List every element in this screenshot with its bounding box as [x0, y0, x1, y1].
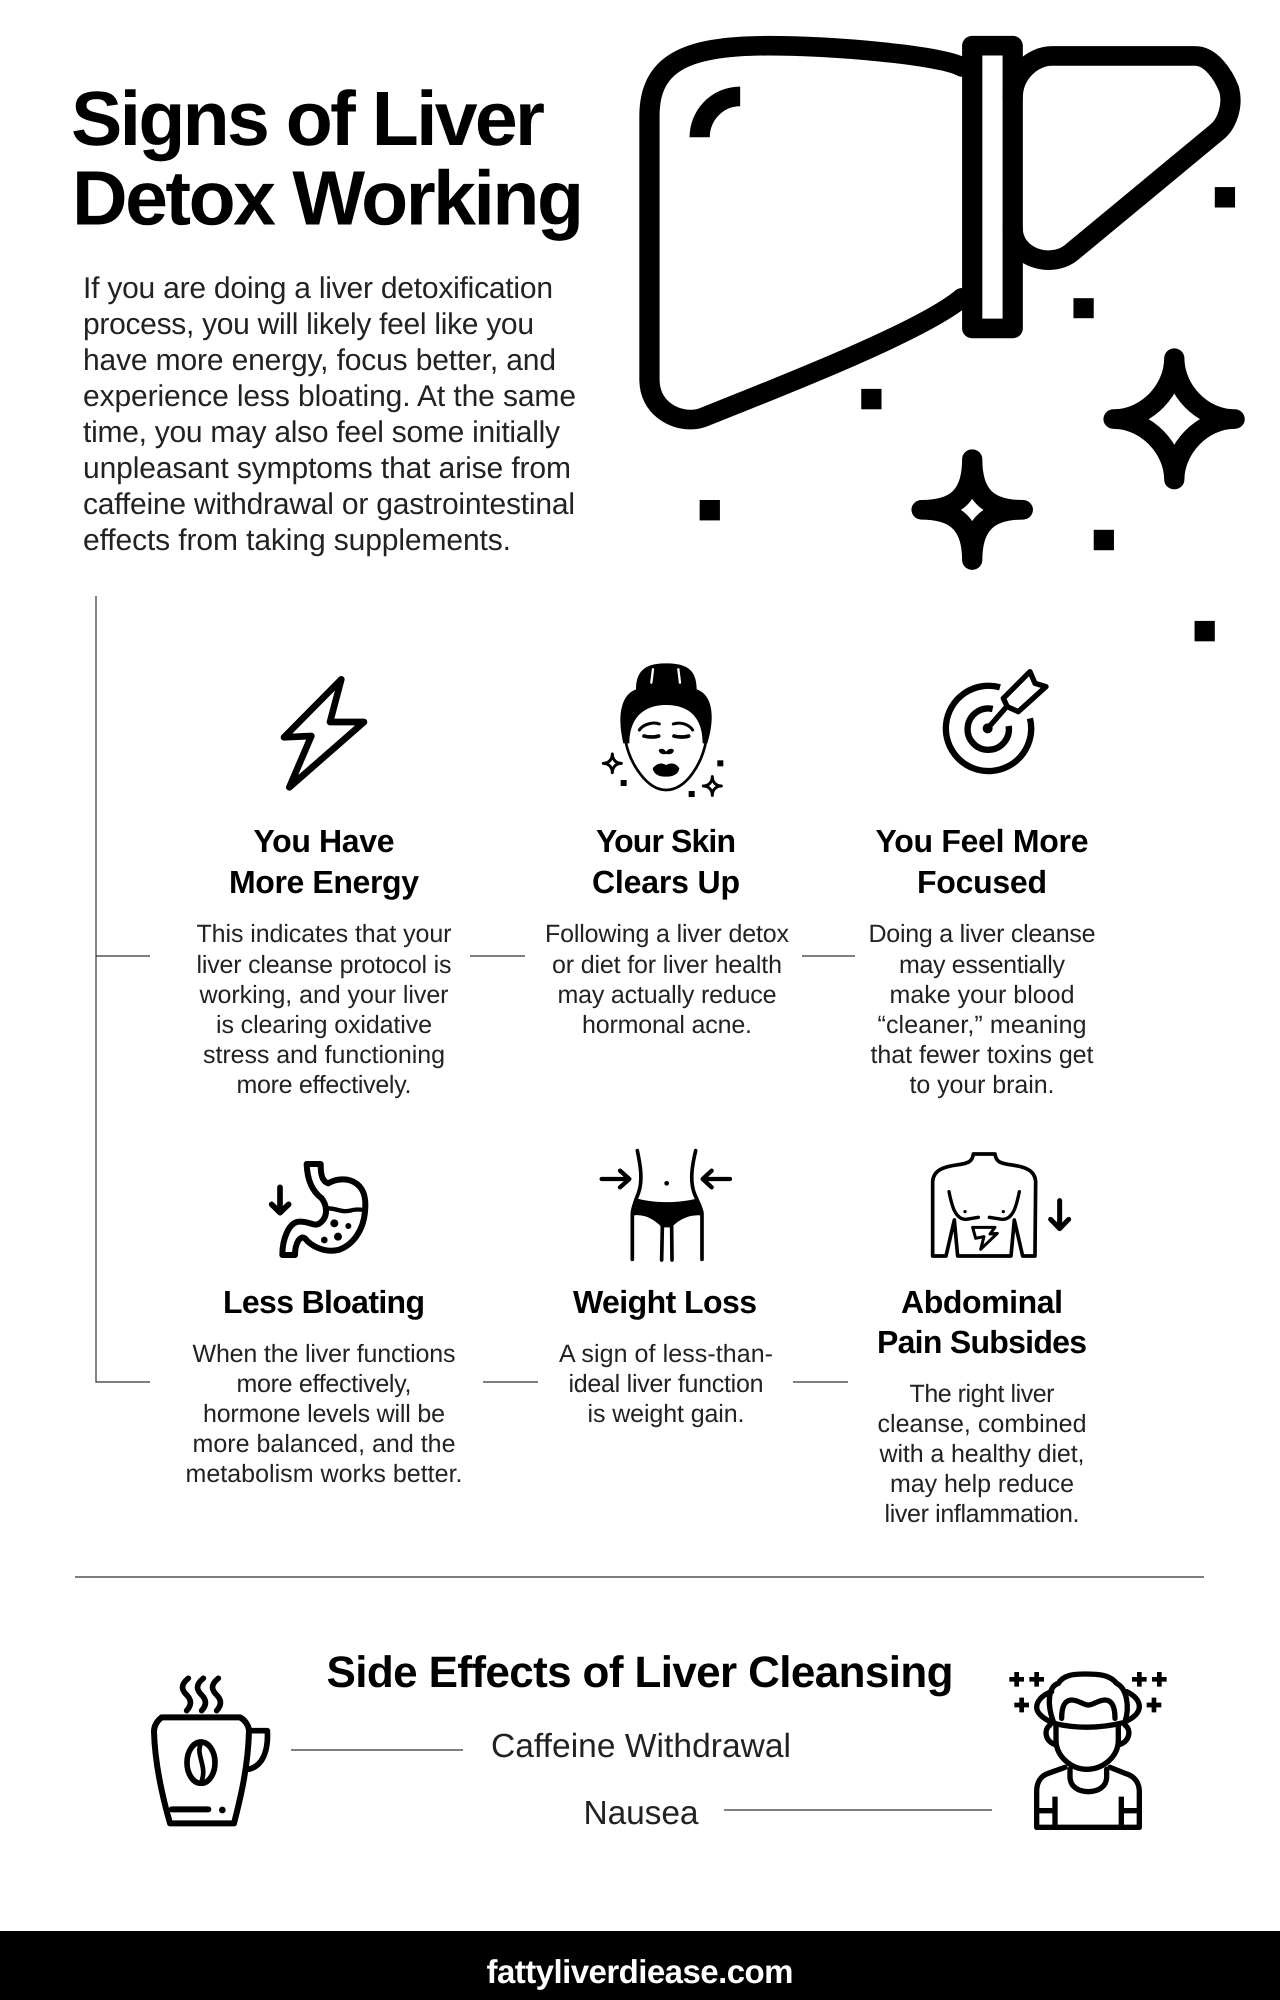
heading: abdominal pain subsides [877, 1284, 1087, 1360]
panel: side effects [154, 1648, 1167, 1832]
text: abdominal pain description [878, 1380, 1086, 1528]
text: skin description: may actually reduce [558, 981, 776, 1009]
panel: weight loss [559, 1151, 773, 1428]
text: focus description: to your brain. [910, 1071, 1054, 1099]
text: bloating description: metabolism works better. [186, 1460, 462, 1488]
icon: dizzy man [1009, 1672, 1167, 1827]
icon: stomach with down arrow [272, 1164, 365, 1255]
connector lines: left rail and branches [96, 596, 855, 1382]
text: focus description: that fewer toxins get [870, 1041, 1094, 1069]
icon: face with sparkles [603, 663, 723, 797]
text: energy description: working, and your liver [198, 981, 448, 1009]
text: energy description [196, 920, 452, 1099]
heading: abdominal pain subsides: Abdominal [901, 1284, 1063, 1320]
heading: you feel more focused [876, 823, 1088, 900]
heading: abdominal pain subsides: Pain Subsides [877, 1324, 1087, 1360]
text: focus description: “cleaner,” meaning [878, 1011, 1086, 1039]
intro paragraph: process, you will likely feel like you [83, 308, 534, 341]
text: focus description: may essentially [899, 951, 1066, 979]
text: weight loss description: is weight gain. [588, 1400, 744, 1428]
text: bloating description: When the liver functions [192, 1340, 456, 1368]
text: caffeine withdrawal: Caffeine Withdrawal [491, 1728, 791, 1765]
heading: you have more energy [229, 823, 419, 900]
heading: you feel more focused: Focused [917, 864, 1047, 900]
intro paragraph: unpleasant symptoms that arise from [83, 452, 571, 485]
text: abdominal pain description: may help reduce [890, 1470, 1074, 1498]
title: Detox Working [72, 156, 584, 242]
panel: your skin clears up [545, 663, 790, 1039]
heading: your skin clears up: Your Skin [596, 823, 736, 859]
text: abdominal pain description: with a healthy diet, [878, 1440, 1084, 1468]
title: Signs of Liver [71, 76, 545, 162]
heading: weight loss: Weight Loss [573, 1284, 757, 1320]
text: energy description: stress and functioning [203, 1041, 445, 1069]
text: energy description: This indicates that your [196, 920, 452, 948]
panel: abdominal pain subsides [877, 1154, 1087, 1528]
text: nausea: Nausea [584, 1795, 699, 1832]
text: abdominal pain description: The right liver [910, 1380, 1054, 1408]
text: focus description [868, 920, 1096, 1099]
text: focus description: make your blood [890, 981, 1074, 1009]
icon: lightning bolt [284, 679, 364, 787]
text: abdominal pain description: liver inflammation. [884, 1500, 1080, 1528]
icon: waist with inward arrows [602, 1151, 730, 1260]
heading: less bloating: Less Bloating [223, 1284, 425, 1320]
text: skin description: Following a liver detox [545, 920, 790, 948]
icon: liver with sparkles [649, 46, 1235, 641]
text: focus description: Doing a liver cleanse [868, 920, 1096, 948]
text: energy description: is clearing oxidative [216, 1011, 432, 1039]
panel: you have more energy [196, 679, 452, 1099]
text: skin description [545, 920, 790, 1039]
intro paragraph: experience less bloating. At the same [83, 380, 576, 413]
text: energy description: liver cleanse protocol is [196, 951, 452, 979]
heading: you have more energy: You Have [254, 823, 394, 859]
intro paragraph: have more energy, focus better, and [83, 344, 556, 377]
intro paragraph [83, 272, 576, 557]
intro paragraph: If you are doing a liver detoxification [83, 272, 553, 305]
heading: side effects of liver cleansing: Side Effects of Liver Cleansing [326, 1648, 954, 1697]
heading: you have more energy: More Energy [229, 864, 419, 900]
text: bloating description [186, 1340, 462, 1488]
text: bloating description: more effectively, [236, 1370, 412, 1398]
text: weight loss description: ideal liver function [568, 1370, 764, 1398]
text: bloating description: more balanced, and the [192, 1430, 456, 1458]
text: skin description: or diet for liver health [552, 951, 782, 979]
footer bar [0, 1931, 1280, 2000]
text: bloating description: hormone levels will be [203, 1400, 445, 1428]
panel: you feel more focused [868, 672, 1096, 1099]
icon: torso with pain bolt [933, 1154, 1069, 1256]
title [71, 76, 584, 242]
intro paragraph: effects from taking supplements. [83, 524, 511, 557]
text: weight loss description: A sign of less-than- [559, 1340, 773, 1368]
intro paragraph: time, you may also feel some initially [83, 416, 560, 449]
heading: your skin clears up: Clears Up [592, 864, 740, 900]
icon: target with arrow [946, 672, 1046, 771]
footer url: fattyliverdiease.com [486, 1953, 794, 1990]
heading: your skin clears up [592, 823, 740, 900]
text: weight loss description [559, 1340, 773, 1428]
text: energy description: more effectively. [236, 1071, 412, 1099]
heading: you feel more focused: You Feel More [876, 823, 1088, 859]
text: abdominal pain description: cleanse, combined [878, 1410, 1086, 1438]
panel: less bloating [186, 1164, 462, 1488]
icon: coffee cup [154, 1678, 267, 1823]
text: skin description: hormonal acne. [582, 1011, 752, 1039]
intro paragraph: caffeine withdrawal or gastrointestinal [83, 488, 575, 521]
